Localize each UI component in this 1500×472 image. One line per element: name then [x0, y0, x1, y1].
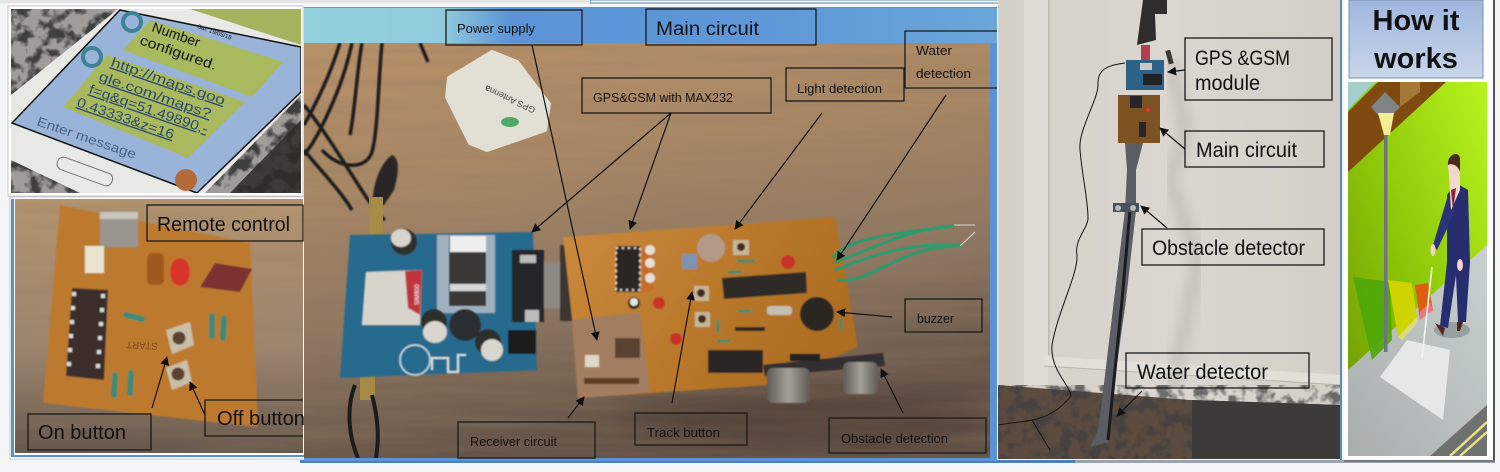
label: off button [205, 400, 305, 436]
board marking: START: START [126, 338, 158, 351]
label: GPS and GSM module: GPS &GSM [1195, 47, 1290, 70]
label: power supply: Power supply [457, 21, 535, 36]
ultrasonic sensor on cane [1113, 203, 1139, 212]
SIM800 chip [362, 270, 422, 325]
label: water detection: detection [916, 66, 971, 81]
sidewalk [1348, 245, 1487, 456]
GPS antenna puck [447, 52, 549, 150]
second IC [708, 350, 763, 373]
cane handle [1137, 0, 1167, 45]
label: main circuit on cane: Main circuit [1196, 139, 1297, 162]
label: light detection [786, 68, 904, 101]
heading: how it works: How it [1372, 5, 1460, 37]
label: remote control: Remote control [157, 214, 290, 236]
white connector [85, 246, 104, 273]
chat bubble: number configured [123, 19, 283, 97]
label: on button [28, 414, 151, 450]
remote PCB [43, 205, 258, 427]
power wire [998, 63, 1125, 450]
ultrasonic obstacle sensor [763, 353, 885, 403]
label: water detection [905, 31, 997, 88]
resistors [114, 315, 224, 395]
power regulator [615, 338, 640, 358]
panel: main circuit [304, 7, 997, 461]
label: receiver circuit [458, 422, 595, 458]
crystal [767, 306, 792, 315]
label: track button [635, 413, 747, 445]
heading: how it works: works [1373, 43, 1458, 75]
SIM800 chip: SIM800 [415, 284, 421, 305]
LDR light sensor [697, 234, 725, 262]
skirting board [1044, 356, 1340, 385]
street lamp [1371, 92, 1400, 352]
door frame [1024, 0, 1050, 385]
cane ribbon shaft [1090, 143, 1143, 447]
stub antenna [372, 155, 398, 205]
capacitors [391, 229, 417, 255]
arrow: off button [190, 382, 205, 415]
GSM module board [340, 229, 537, 378]
cane main circuit board [1118, 95, 1160, 143]
panel: remote control photo [10, 197, 306, 459]
capacitor [147, 253, 164, 285]
message input hint: Enter message [35, 114, 138, 162]
label: water detector [1126, 353, 1309, 388]
detection zones [1380, 340, 1450, 420]
SMA connectors [360, 197, 383, 400]
send button [175, 169, 197, 191]
red LED [170, 258, 190, 286]
main PCB [563, 217, 858, 398]
home button [55, 155, 114, 187]
label: remote control [147, 205, 303, 241]
white cane [1422, 267, 1432, 358]
label: track button: Track button [647, 425, 720, 440]
electrolytic capacitors [642, 248, 653, 292]
label: buzzer [905, 299, 982, 332]
green water probes [833, 226, 962, 280]
16-pin IC [616, 246, 640, 292]
trimmer [682, 254, 697, 269]
label: power supply [446, 10, 582, 45]
heading: how it works [1349, 0, 1483, 78]
antenna cables [304, 43, 428, 220]
chat bubble: map link: 0.43333&z=16 [75, 95, 176, 142]
arrows: cane callouts [1117, 70, 1185, 416]
chat bubble: number configured: Sat. 19/05/18 [196, 24, 233, 42]
IC chip [66, 288, 108, 380]
chat bubble: number configured: configured. [138, 32, 219, 73]
label: obstacle detector: Obstacle detector [1152, 237, 1305, 260]
label: off button: Off button [217, 408, 305, 430]
panel: phone SMS photo [8, 6, 303, 196]
label: GPS and GSM module: module [1195, 72, 1260, 95]
microcontroller [722, 272, 807, 299]
arrows: circuit callouts [532, 45, 946, 418]
panel: how it works [1344, 0, 1495, 462]
title: main circuit: Main circuit [656, 19, 760, 40]
chat bubble: map link: gle.com/maps? [97, 69, 213, 121]
chat bubble: map link: f=q&q=51.49890,- [87, 82, 210, 137]
label: GPS and GSM module [1185, 38, 1332, 100]
GPS and GSM board [1126, 50, 1174, 90]
label: water detector: Water detector [1137, 361, 1268, 384]
resistors [717, 261, 841, 341]
label: obstacle detection: Obstacle detection [841, 431, 948, 446]
buzzer [800, 297, 834, 331]
SIM holder [437, 235, 495, 313]
DB9 serial connector [511, 244, 573, 323]
label: main circuit on cane [1185, 131, 1324, 167]
power jack [508, 330, 536, 354]
label: on button: On button [38, 422, 126, 444]
tactile buttons [694, 240, 749, 327]
carpet [998, 385, 1340, 459]
panel: cane photo [998, 0, 1342, 460]
label: obstacle detector [1142, 229, 1324, 265]
person [1430, 154, 1470, 338]
cane shadow [1170, 60, 1198, 390]
label: receiver circuit: Receiver circuit [470, 434, 557, 449]
label: GPS and GSM with MAX232: GPS&GSM with MAX232 [593, 90, 733, 105]
chat bubble: number configured: Number [150, 19, 203, 50]
voltage regulator [100, 211, 138, 247]
GPS antenna puck: GPS Antenna [483, 83, 537, 115]
red LEDs [653, 255, 795, 345]
RF receiver module [200, 263, 252, 292]
phone screen [12, 10, 301, 193]
label: light detection: Light detection [797, 81, 882, 96]
road [1430, 405, 1487, 456]
label: GPS and GSM with MAX232 [582, 78, 771, 113]
antenna trace [400, 345, 430, 375]
title: main circuit [646, 9, 816, 45]
chat bubble: map link: http://maps.goo [109, 55, 227, 108]
label: obstacle detection [829, 418, 986, 453]
illustration: blind person walking with cane [1348, 82, 1487, 456]
tactile buttons [166, 322, 194, 390]
avatars [83, 13, 141, 66]
header band [304, 8, 997, 43]
arrow: on button [152, 357, 167, 408]
chat bubble: map link [63, 55, 245, 158]
cable lower left [349, 385, 378, 458]
label: water detection: Water [916, 43, 953, 58]
label: buzzer: buzzer [917, 311, 955, 326]
